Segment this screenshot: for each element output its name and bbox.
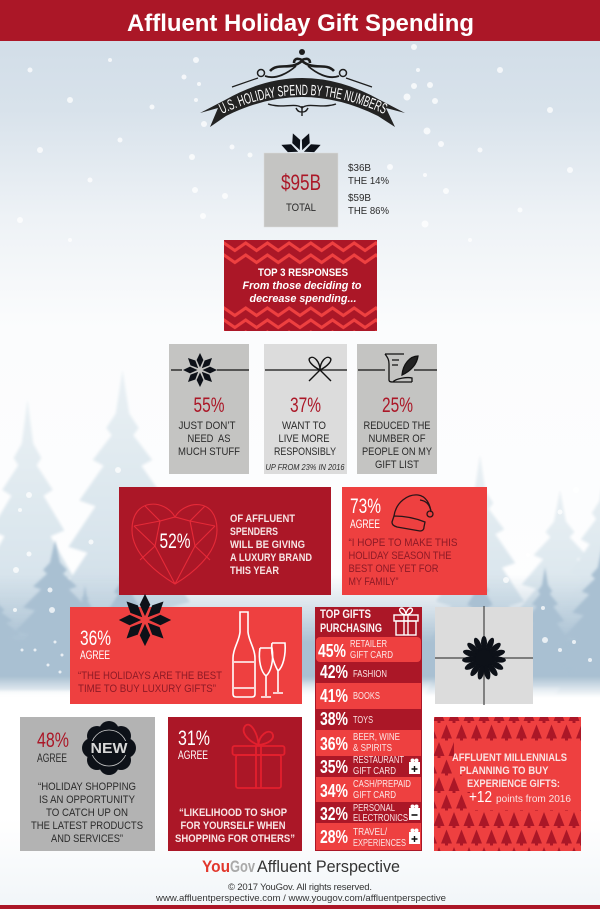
footer copyright: [155, 882, 446, 904]
icon: white gift box: [394, 608, 418, 635]
panel: 73% agree best holiday: MY FAMILY”: [348, 576, 399, 588]
ribbon text: U.S. HOLIDAY SPEND BY THE NUMBERS: [218, 84, 388, 114]
panel: 52% luxury brand: A LUXURY BRAND: [230, 552, 312, 564]
footer logo: YouGov Affluent Perspective: You: [202, 857, 230, 876]
icon: small gift minus: [409, 804, 420, 820]
panel: 73% agree best holiday: “I HOPE TO MAKE THIS: [348, 537, 458, 549]
panel: 36% agree best time: TIME TO BUY LUXURY GIFTS”: [78, 683, 216, 695]
panel: top gifts purchasing: & SPIRITS: [353, 743, 392, 754]
panel: 52% luxury brand: OF AFFLUENT: [230, 513, 295, 525]
spend breakdown text: $36B: [348, 162, 371, 174]
panel: affluent millennials tree pattern: points from 2016: [496, 793, 571, 805]
icon: red gift outline: [232, 725, 284, 788]
panel: top gifts purchasing: TOYS: [353, 715, 373, 726]
panel: 48% agree new products: AGREE: [37, 753, 67, 765]
panel: total spend gift box: $95B: [281, 170, 321, 195]
icon: black flower bow: [462, 636, 506, 680]
panel: top 3 responses: decrease spending...: [250, 293, 356, 305]
icon: gem heart: [132, 504, 217, 584]
panel: 73% agree best holiday: AGREE: [350, 519, 380, 531]
spend breakdown text: $59B: [348, 192, 371, 204]
panel: 25% reduced gift list: NUMBER OF: [368, 433, 426, 445]
panel: 55% just don't need as much stuff: 55%: [194, 394, 224, 417]
panel: top gifts purchasing: 36%: [320, 734, 348, 754]
panel: 25% reduced gift list: [357, 344, 437, 474]
panel: top gifts purchasing: RETAILER: [350, 639, 387, 650]
footer logo: YouGov Affluent Perspective: Gov: [230, 857, 255, 876]
panel: top gifts purchasing: EXPERIENCES: [353, 838, 406, 849]
icon: small gift plus: [409, 758, 420, 774]
header bar with title: [0, 0, 600, 41]
panel: top gifts purchasing: ELECTRONICS: [353, 813, 408, 824]
panel: 48% agree new products: 48%: [37, 729, 69, 752]
panel: 36% agree best time: AGREE: [80, 650, 110, 662]
panel: 55% just don't need as much stuff: MUCH STUFF: [178, 446, 240, 458]
panel: 31% agree shop for yourself: [168, 717, 302, 851]
panel: top gifts purchasing: PURCHASING: [320, 623, 382, 635]
panel: top gifts purchasing: GIFT CARD: [353, 766, 396, 777]
panel: 31% agree shop for yourself: “LIKELIHOOD TO SHOP: [179, 807, 287, 819]
icon: gift bow on total box: [273, 125, 329, 181]
panel: 48% agree new products: TO CATCH UP ON: [46, 807, 128, 819]
banner: U.S. holiday spend by the numbers: [200, 49, 405, 127]
panel: 52% luxury brand: WILL BE GIVING: [230, 539, 305, 551]
icon: ribbon bow: [309, 357, 331, 381]
panel: top gifts purchasing: [315, 607, 422, 851]
panel: top gifts purchasing: TOP GIFTS: [320, 609, 371, 621]
icon: small gift plus travel: [409, 828, 420, 844]
panel: top 3 responses: TOP 3 RESPONSES: [258, 267, 348, 279]
panel: top gifts purchasing: 32%: [320, 804, 348, 824]
panel: 52% luxury brand: SPENDERS: [230, 526, 278, 538]
spend breakdown text: [348, 162, 389, 217]
panel: 25% reduced gift list: 25%: [382, 394, 413, 417]
gift rows: [316, 637, 421, 850]
panel: top gifts purchasing: GIFT CARD: [350, 650, 393, 661]
panel: 73% agree best holiday: HOLIDAY SEASON THE: [348, 550, 452, 562]
panel: 36% agree best time: “THE HOLIDAYS ARE THE BEST: [78, 670, 222, 682]
panel: 37% want to live more responsibly: RESPONSIBLY: [274, 446, 337, 458]
panel: 55% just don't need as much stuff: JUST DON’T: [178, 420, 236, 432]
panel: affluent millennials tree pattern: AFFLUENT MILLENNIALS: [452, 752, 567, 764]
header bar with title: Affluent Holiday Gift Spending: [127, 10, 474, 37]
panel: top gifts purchasing: 45%: [318, 641, 346, 661]
panel: 31% agree shop for yourself: SHOPPING FOR OTHERS”: [175, 833, 295, 845]
panel: top gifts purchasing: 28%: [320, 827, 348, 847]
panel: affluent millennials tree pattern: EXPERIENCE GIFTS:: [467, 778, 560, 790]
panel: top gifts purchasing: BEER, WINE: [353, 732, 400, 743]
panel: 73% agree best holiday: BEST ONE YET FOR: [348, 563, 439, 575]
panel: top gifts purchasing: CASH/PREPAID: [353, 779, 411, 790]
icon: snowflake star: [183, 353, 217, 387]
panel: gray gift with flower bow: [435, 606, 533, 705]
icon: NEW badge: NEW: [90, 741, 128, 757]
panel: 55% just don't need as much stuff: NEED AS: [188, 433, 230, 445]
panel: top gifts purchasing: GIFT CARD: [353, 790, 396, 801]
icon: santa hat: [392, 495, 433, 531]
panel: top gifts purchasing: TRAVEL/: [353, 827, 387, 838]
panel: 48% agree new products: AND SERVICES”: [51, 833, 123, 845]
panel: top gifts purchasing: BOOKS: [353, 691, 380, 702]
panel: 48% agree new products: “HOLIDAY SHOPPING: [38, 781, 136, 793]
spend breakdown text: THE 86%: [348, 205, 389, 217]
banner ornament flourishes: [232, 49, 372, 116]
panel: top gifts purchasing: RESTAURANT: [353, 755, 404, 766]
panel: 25% reduced gift list: REDUCED THE: [364, 420, 430, 432]
panel: top gifts purchasing: 41%: [320, 686, 348, 706]
footer logo: YouGov Affluent Perspective: Affluent Perspective: [257, 857, 400, 876]
panel: top 3 responses: From those deciding to: [242, 280, 362, 292]
panel: 48% agree new products: IS AN OPPORTUNITY: [39, 794, 136, 806]
panel: 48% agree new products: [20, 717, 155, 851]
panel: 37% want to live more responsibly: UP FROM 23% IN 2016: [266, 462, 345, 472]
panel: 31% agree shop for yourself: 31%: [178, 727, 210, 750]
spend breakdown text: THE 14%: [348, 175, 389, 187]
panel: affluent millennials tree pattern: [434, 717, 581, 851]
panel: top gifts purchasing: 35%: [320, 757, 348, 777]
panel: 36% agree best time: [70, 607, 302, 704]
footer logo: YouGov Affluent Perspective: [202, 857, 400, 876]
bottom bar: [0, 905, 600, 909]
panel: 37% want to live more responsibly: 37%: [290, 394, 321, 417]
icon: scroll and quill: [385, 354, 418, 382]
icon: champagne bottle and glasses: [233, 612, 285, 697]
panel: 25% reduced gift list: PEOPLE ON MY: [362, 446, 433, 458]
panel: 25% reduced gift list: GIFT LIST: [375, 459, 419, 471]
icon: black snowflake on panel: [119, 594, 171, 646]
panel: 55% just don't need as much stuff: [169, 344, 249, 474]
panel: top 3 responses: [224, 240, 377, 331]
panel: 37% want to live more responsibly: [264, 344, 347, 474]
panel: 73% agree best holiday: [342, 487, 487, 595]
panel: 48% agree new products: THE LATEST PRODUCTS: [31, 820, 143, 832]
panel: 36% agree best time: 36%: [80, 627, 111, 650]
panel: affluent millennials tree pattern: PLANNING TO BUY: [460, 765, 549, 777]
panel: 52% luxury brand: THIS YEAR: [230, 565, 279, 577]
panel: affluent millennials tree pattern: +12: [469, 789, 492, 806]
panel: 31% agree shop for yourself: AGREE: [178, 750, 208, 762]
panel: top gifts purchasing: PERSONAL: [353, 803, 395, 814]
ribbon shape: [200, 78, 405, 127]
panel: 31% agree shop for yourself: FOR YOURSELF WHEN: [180, 820, 286, 832]
panel: total spend gift box: TOTAL: [286, 202, 316, 214]
panel: 52% luxury brand: [119, 487, 331, 595]
panel: top gifts purchasing: FASHION: [353, 669, 387, 680]
panel: 73% agree best holiday: 73%: [350, 495, 381, 518]
panel: 37% want to live more responsibly: LIVE MORE: [278, 433, 330, 445]
panel: total spend gift box: [264, 153, 338, 227]
panel: top gifts purchasing: 34%: [320, 781, 348, 801]
footer copyright: © 2017 YouGov. All rights reserved.: [228, 882, 372, 893]
panel: top gifts purchasing: 42%: [320, 662, 348, 682]
footer copyright: www.affluentperspective.com / www.yougov.com/affluentperspective: [155, 893, 446, 904]
panel: top gifts purchasing: 38%: [320, 709, 348, 729]
panel: 52% luxury brand: 52%: [160, 530, 190, 553]
panel: 37% want to live more responsibly: WANT TO: [282, 420, 326, 432]
